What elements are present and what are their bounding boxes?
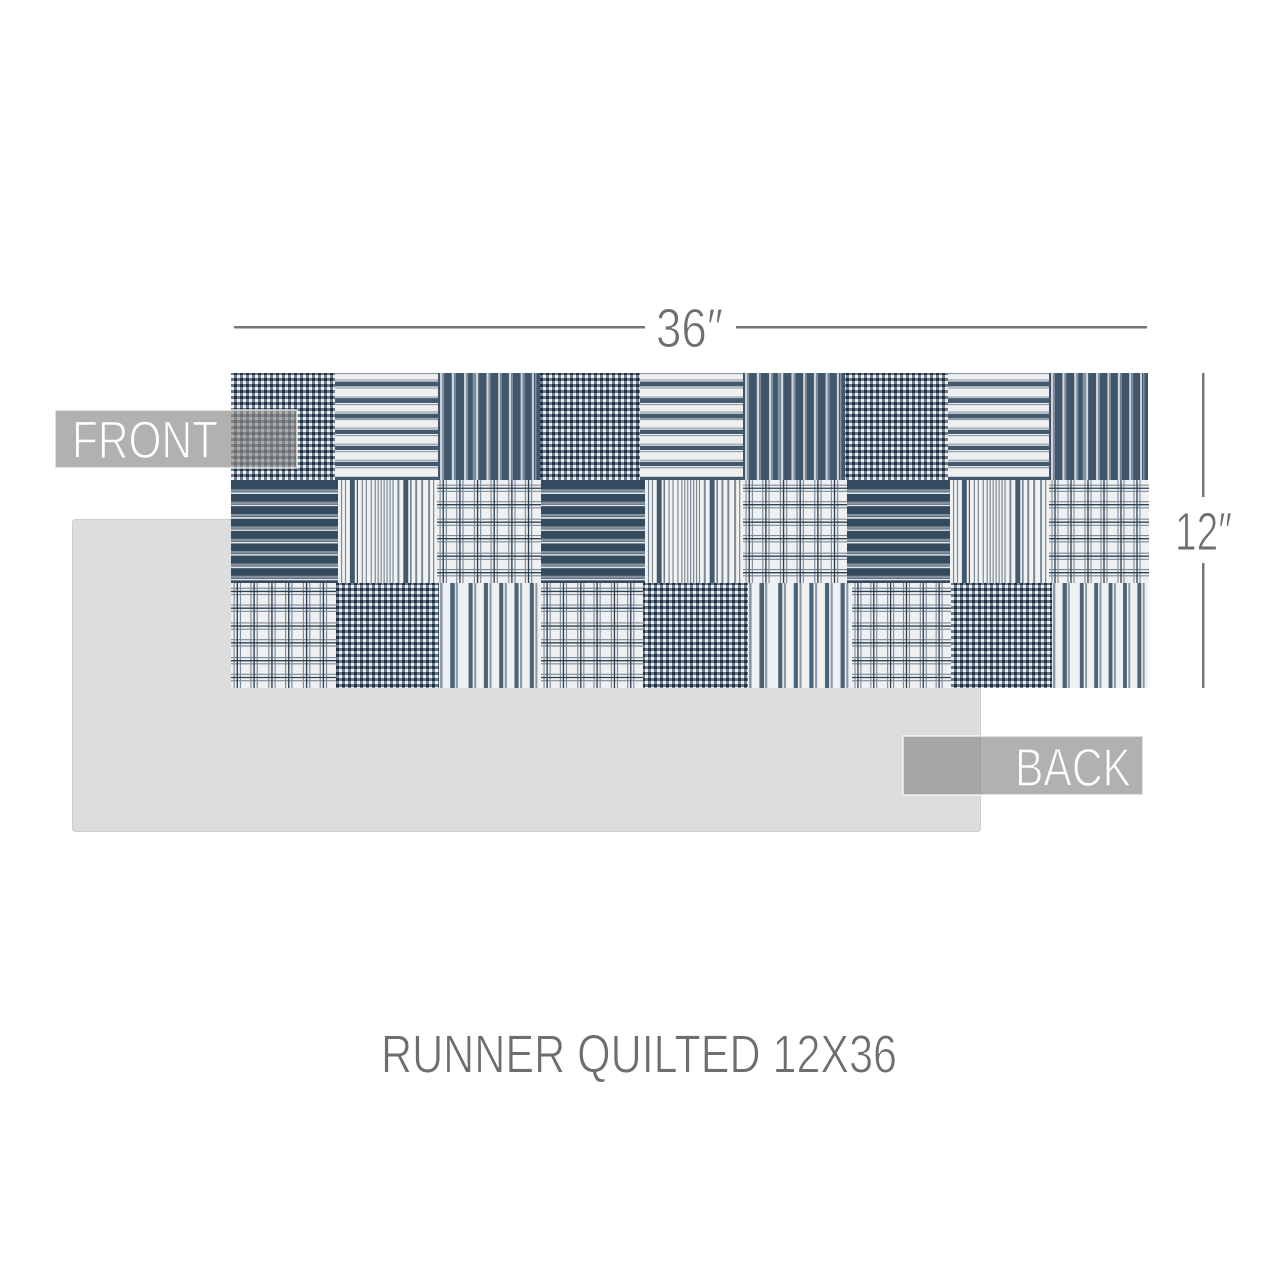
patch: plaid: [852, 583, 951, 688]
panel: front of quilted runner: [231, 373, 1149, 688]
patch: gingham: [951, 583, 1052, 688]
patch: medium vertical stripes: [1052, 583, 1148, 688]
patch: light horizontal stripes: [640, 373, 743, 480]
patch: gingham: [643, 583, 748, 688]
patch: thin vertical stripes: [645, 480, 743, 583]
patch: thin vertical stripes: [950, 480, 1049, 583]
label: front: FRONT: [72, 411, 218, 470]
patch: dark vertical stripes: [1049, 373, 1148, 480]
patch: gingham: [845, 373, 948, 480]
patch: gingham: [231, 373, 335, 480]
title: RUNNER QUILTED 12X36: [381, 1024, 897, 1084]
panel: back of runner: [72, 520, 980, 832]
patch: medium vertical stripes: [748, 583, 852, 688]
row: top patches: [231, 373, 1148, 480]
patch: gingham: [540, 373, 640, 480]
patch: plaid: [1049, 480, 1149, 583]
patch: light horizontal stripes: [948, 373, 1049, 480]
patch: dark horizontal stripes: [541, 480, 645, 583]
dimension: height 12 inches: 12″: [1175, 502, 1232, 562]
patch: dark horizontal stripes: [847, 480, 950, 583]
patch: plaid: [437, 480, 541, 583]
patch: medium vertical stripes: [439, 583, 541, 688]
dimension: width 36 inches: 36″: [656, 297, 723, 359]
row: middle patches: [231, 480, 1149, 583]
patch: plaid: [743, 480, 847, 583]
row: bottom patches: [231, 583, 1148, 688]
patch: plaid: [541, 583, 643, 688]
patch: plaid: [231, 583, 336, 688]
patch: dark horizontal stripes: [231, 480, 338, 583]
patch: dark vertical stripes: [743, 373, 845, 480]
patch: dark vertical stripes: [438, 373, 540, 480]
label: back: BACK: [1015, 738, 1131, 798]
patch: thin vertical stripes: [338, 480, 437, 583]
patch: light horizontal stripes: [335, 373, 438, 480]
patch: gingham: [336, 583, 439, 688]
label: back: [903, 736, 1143, 798]
